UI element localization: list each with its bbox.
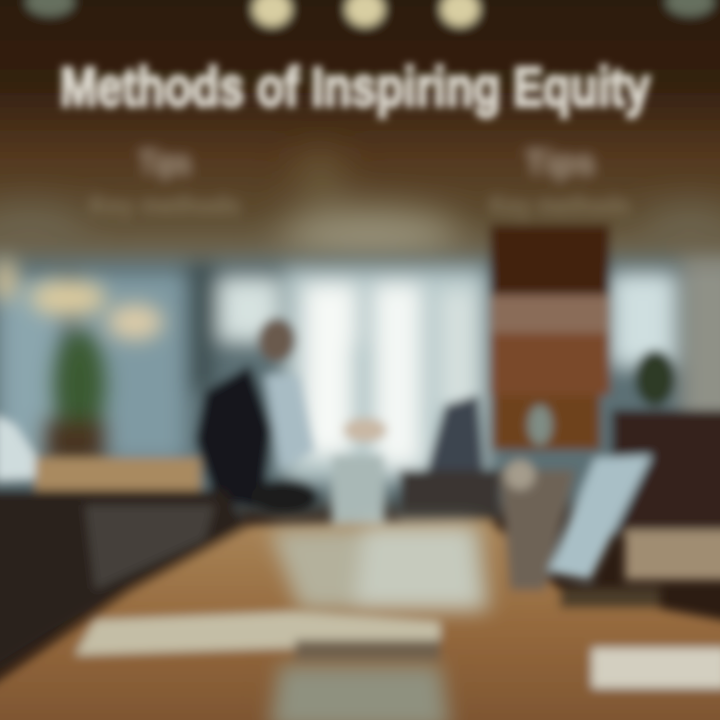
lower left dark furniture [0,490,245,680]
right caption: Key methods [490,190,630,220]
right subheading: Tips [525,144,595,182]
back desk [35,458,200,494]
open book on table [75,612,440,660]
ceiling lights [26,0,714,26]
second person [420,395,485,495]
centre ceiling glow [0,154,720,260]
ceiling background [0,0,720,270]
left caption: Key methods [90,190,240,220]
laptop on right [500,405,660,608]
centre paper stack [332,418,387,530]
left laptop [0,415,50,480]
right dark furniture [400,350,720,580]
plant and flowers [0,258,163,465]
person [195,318,319,515]
foreground table [0,520,720,720]
papers bottom right [592,648,720,688]
wooden column [490,225,610,450]
left subheading: Tips [139,144,191,182]
windows band [0,258,720,508]
